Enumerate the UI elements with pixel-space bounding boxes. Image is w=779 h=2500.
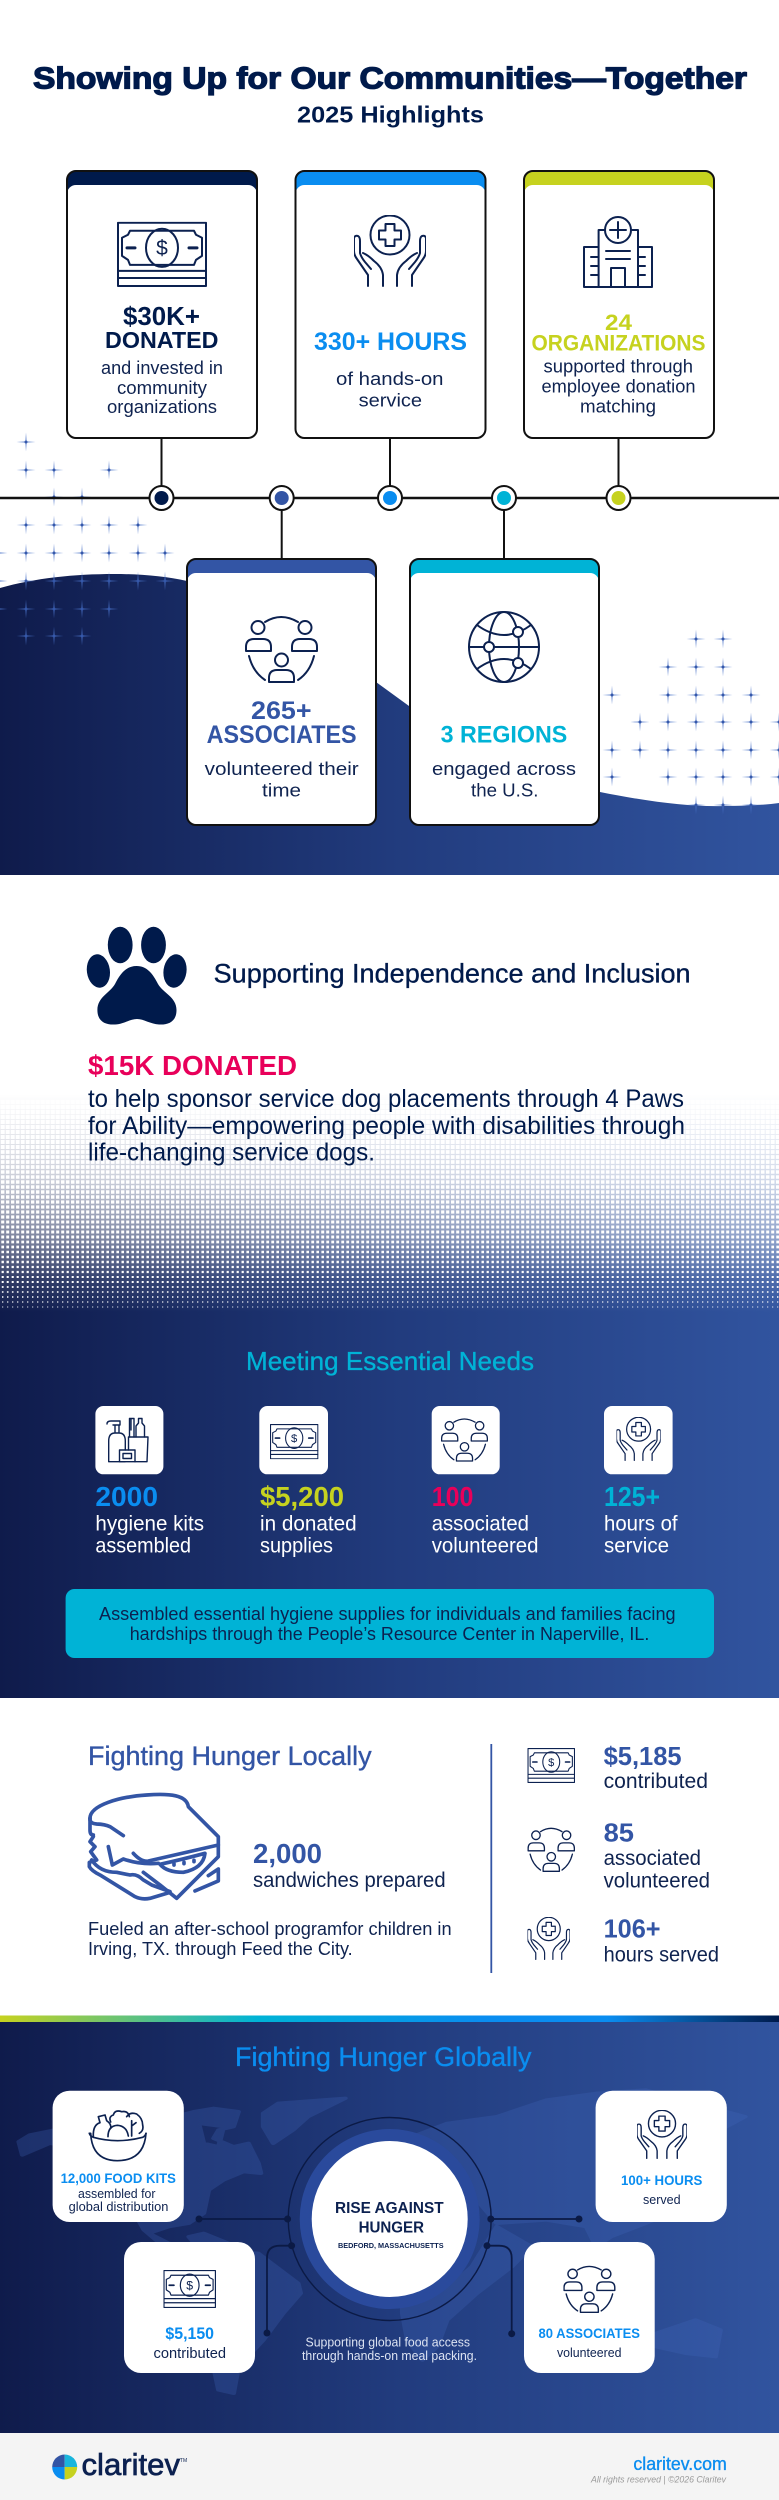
icon: sandwich (89, 1794, 218, 1899)
stat: hours served: 106+ (604, 1914, 661, 1944)
stat: hours of service (604, 1406, 678, 1558)
hub text: RISE AGAINST (335, 2200, 444, 2217)
description: employee donation (542, 377, 696, 397)
label (432, 1513, 538, 1558)
stat: $15K donated: $15K DONATED (88, 1050, 297, 1081)
icon: money (118, 223, 206, 286)
description: for Ability—empowering people with disabilities through (88, 1112, 685, 1140)
hub text: HUNGER (359, 2220, 424, 2237)
stat: donated supplies (259, 1406, 357, 1558)
divider (490, 1744, 492, 1973)
stat text: contributed (154, 2346, 226, 2362)
description (432, 758, 576, 801)
tile: food kits (53, 2091, 184, 2222)
description: supported through (544, 357, 693, 377)
description (542, 357, 696, 417)
website and copyright (590, 2454, 727, 2484)
label: hours of (604, 1513, 678, 1536)
stat text: 24 (605, 310, 633, 335)
world map (19, 2090, 745, 2393)
stat text (621, 2172, 702, 2207)
stat: hours served (528, 1914, 719, 1967)
description: service (359, 390, 422, 411)
sparkle pattern right (602, 630, 779, 814)
stat text (61, 2170, 176, 2214)
stat text: DONATED (105, 327, 218, 353)
stat: sandwiches: sandwiches prepared (253, 1869, 446, 1892)
website and copyright: claritev.com (633, 2454, 727, 2474)
description: Irving, TX. through Feed the City. (88, 1939, 353, 1959)
label: assembled (95, 1535, 191, 1558)
label: hygiene kits (95, 1513, 204, 1536)
icon: globe (469, 612, 539, 682)
website and copyright: All rights reserved | ©2026 Claritev (590, 2474, 726, 2484)
stat text: 330+ HOURS (314, 328, 467, 356)
description: matching (580, 397, 656, 417)
tile: $5,150 contributed (124, 2242, 255, 2373)
card: 24 organizations (524, 171, 714, 438)
card: 265+ associates (187, 559, 376, 825)
heading: Meeting Essential Needs (246, 1346, 534, 1376)
description: Fueled an after-school programfor children in (88, 1919, 452, 1939)
label: supplies (260, 1535, 333, 1558)
stat text: 12,000 FOOD KITS (61, 2170, 176, 2186)
label: in donated (260, 1513, 357, 1536)
icon: caring hands (637, 2110, 687, 2158)
footer (0, 2433, 779, 2500)
stat text: global distribution (69, 2199, 168, 2214)
stat text: $30K+ (123, 303, 200, 331)
stat: contributed (528, 1741, 708, 1793)
icon: people (246, 617, 317, 682)
number: $5,200 (260, 1481, 344, 1512)
label: service (604, 1535, 669, 1558)
heading: Fighting Hunger Locally (88, 1741, 372, 1771)
callout banner (66, 1589, 714, 1658)
caption: through hands-on meal packing. (302, 2348, 477, 2363)
stat: sandwiches: 2,000 (253, 1838, 322, 1869)
label: associated (432, 1513, 529, 1536)
stat text: 3 REGIONS (441, 722, 567, 749)
stat: sandwiches (253, 1838, 446, 1892)
rainbow divider bar (0, 2016, 779, 2022)
stat text: ASSOCIATES (207, 721, 357, 749)
description: volunteered their (205, 758, 359, 779)
card: 3 regions (410, 559, 599, 825)
icon: paw print (85, 927, 189, 1025)
stat text: 100+ HOURS (621, 2172, 702, 2188)
logo: claritev (82, 2447, 180, 2482)
stat text (207, 697, 357, 749)
number: 125+ (604, 1481, 660, 1512)
description (88, 1919, 452, 1959)
stat text: 265+ (251, 697, 312, 725)
hub text: BEDFORD, MASSACHUSETTS (338, 2241, 444, 2250)
stat text (154, 2325, 226, 2362)
number: 100 (432, 1481, 473, 1512)
curved gradient wave background (0, 574, 779, 875)
icon: money (164, 2271, 215, 2307)
stat text: $5,150 (165, 2325, 214, 2343)
heading: Supporting Independence and Inclusion (214, 959, 691, 989)
description: of hands-on (336, 368, 444, 389)
panel: meeting essential needs background with halftone (0, 1085, 779, 1698)
description: community (117, 378, 207, 398)
stat: associates: volunteered (604, 1870, 710, 1893)
stat text: assembled for (78, 2186, 156, 2201)
stat text (105, 303, 218, 353)
icon: hospital (584, 217, 652, 287)
stat: contributed: $5,185 (604, 1741, 682, 1771)
label (260, 1513, 357, 1558)
description (101, 358, 223, 417)
stat: associates (528, 1818, 710, 1893)
stat text: served (643, 2192, 681, 2207)
panel: 2025 highlights hero (0, 60, 779, 875)
stat: contributed: contributed (604, 1770, 708, 1793)
description: time (262, 780, 301, 801)
number: 2000 (95, 1481, 158, 1512)
caption (302, 2335, 477, 2363)
panel: meeting essential needs content (66, 1346, 714, 1658)
icon: people (442, 1419, 487, 1461)
hub text (335, 2200, 444, 2250)
subtitle: 2025 Highlights (297, 102, 484, 128)
card: 330+ hours (296, 171, 486, 438)
caption: Supporting global food access (306, 2335, 470, 2350)
tile: 80 associates (524, 2242, 655, 2373)
description: and invested in (101, 358, 223, 378)
tile: 100+ hours (596, 2091, 727, 2222)
timeline with connectors (0, 438, 779, 559)
label (95, 1513, 204, 1558)
description: organizations (107, 397, 217, 417)
stat text (538, 2325, 640, 2360)
stat text: 80 ASSOCIATES (538, 2325, 640, 2341)
stat: volunteers (432, 1406, 538, 1558)
icon: money (271, 1425, 318, 1459)
stat text: ORGANIZATIONS (532, 331, 706, 356)
description (88, 1085, 685, 1167)
center circle hub (288, 2118, 491, 2320)
description: to help sponsor service dog placements through 4 Paws (88, 1085, 684, 1113)
card: $30K+ donated (67, 171, 257, 438)
icon: caring hands (354, 216, 426, 286)
connectors (196, 2216, 582, 2337)
icon: people (564, 2266, 615, 2312)
label (604, 1513, 678, 1558)
stat: associates: 85 (604, 1818, 634, 1848)
logo: TM (180, 2458, 187, 2464)
description (336, 368, 444, 411)
sparkle pattern left (0, 432, 174, 646)
description (205, 758, 359, 801)
callout banner: Assembled essential hygiene supplies for individuals and families facing (99, 1604, 676, 1624)
stat: hygiene kits (95, 1406, 204, 1558)
panel: supporting independence and inclusion (85, 927, 691, 1167)
title: Showing Up for Our Communities—Together (33, 60, 747, 96)
description: life-changing service dogs. (88, 1139, 375, 1167)
callout banner: hardships through the People’s Resource Center in Naperville, IL. (130, 1624, 649, 1644)
stat: hours served: hours served (604, 1944, 719, 1967)
stat: associates: associated (604, 1847, 701, 1870)
icon: caring hands (616, 1417, 661, 1460)
stat text: volunteered (557, 2345, 622, 2360)
panel: fighting hunger locally (88, 1741, 719, 1973)
stat text (532, 310, 706, 356)
description: engaged across (432, 758, 576, 779)
heading: Fighting Hunger Globally (235, 2042, 532, 2072)
description: the U.S. (471, 780, 538, 801)
icon: food bowl (89, 2111, 146, 2161)
panel: fighting hunger globally (0, 2022, 779, 2433)
icon: toiletries (107, 1418, 148, 1462)
label: volunteered (432, 1535, 538, 1558)
